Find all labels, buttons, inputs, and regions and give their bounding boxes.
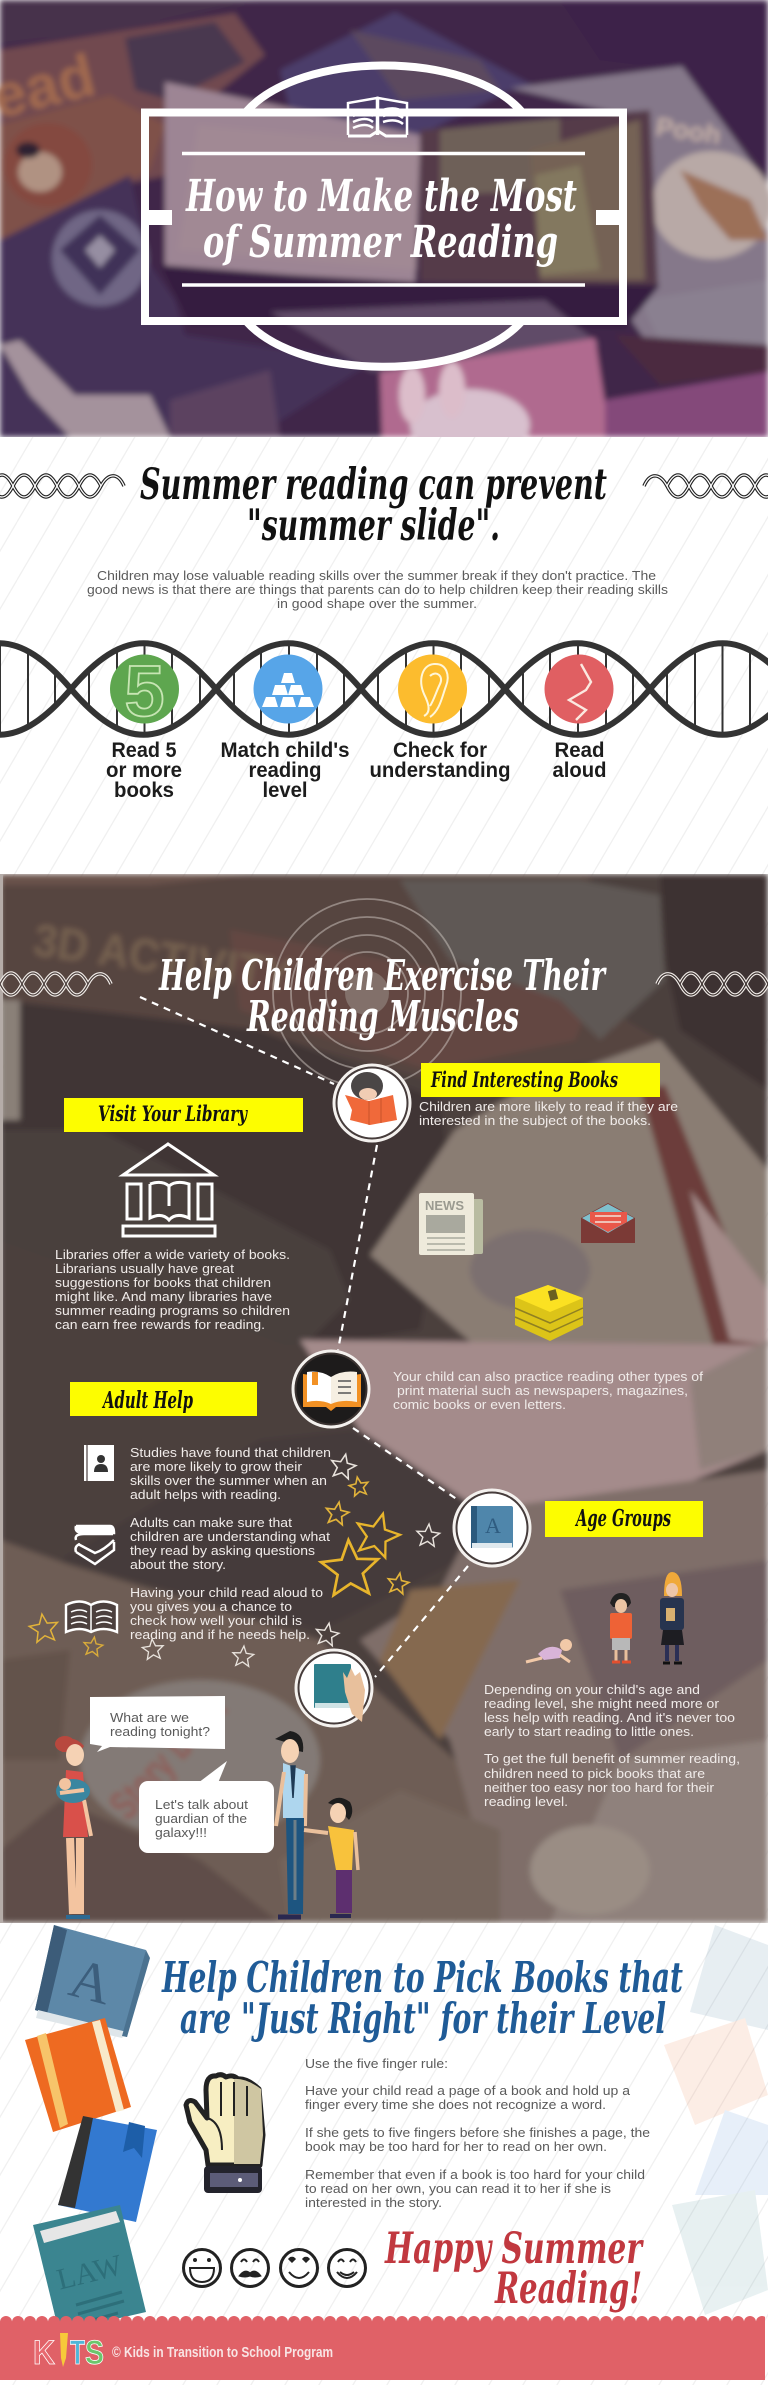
text: other print material [393, 1369, 703, 1412]
text: age groups: reading level, she might need more or [484, 1696, 720, 1711]
icon: ear [398, 654, 467, 724]
text: age groups: neither too easy nor too hard for their [484, 1780, 715, 1795]
panel: hero [0, 0, 768, 461]
text: find interesting books: interested in the subject of the books. [419, 1113, 651, 1128]
happy summer reading message: Reading! [494, 2264, 642, 2314]
icon: speaking profile [544, 654, 614, 724]
text: library [55, 1247, 290, 1332]
faded mirrored books [664, 1925, 768, 2315]
label: visit your library [64, 1098, 303, 1132]
ornament: right wave [644, 475, 768, 497]
text: library: can earn free rewards for reading. [55, 1317, 265, 1332]
label: adult help: Adult Help [102, 1387, 193, 1414]
text: adult help 3: you gives you a chance to [130, 1599, 292, 1614]
step labels: aloud [552, 759, 606, 782]
icons: smiley faces [184, 2250, 366, 2286]
icon: person card [84, 1445, 114, 1481]
heading: Help Children Exercise Their [158, 951, 607, 1000]
panel: reading muscles [0, 874, 768, 1923]
badge frame [141, 66, 627, 367]
text: five finger rule: to read on her own, you can read it to her if she is [305, 2181, 612, 2196]
icon: stack of books [76, 1526, 114, 1564]
intro paragraph: in good shape over the summer. [277, 596, 477, 611]
icon: newspaper: NEWS [425, 1198, 464, 1213]
ornament: right wave [657, 973, 768, 995]
logo: KITS: K [33, 2334, 55, 2372]
speech bubble: guardian of the galaxy [139, 1761, 274, 1853]
photo of book stacks [0, 874, 768, 1923]
icon: number five: 5 [124, 652, 165, 732]
speech bubble: guardian of the galaxy: galaxy!!! [155, 1825, 207, 1840]
text: adult help 2 [130, 1515, 330, 1572]
icon: newspaper [419, 1193, 483, 1255]
step labels [106, 739, 606, 802]
step labels: Check for [393, 739, 487, 762]
icon: teal law book: LAW [53, 2248, 126, 2297]
node: blue A book icon: A [485, 1513, 501, 1538]
figure: boy in yellow [304, 1798, 358, 1916]
text: adult help 1: skills over the summer when an [130, 1473, 327, 1488]
text: age groups: children need to pick books that are [484, 1766, 705, 1781]
text: age groups: To get the full benefit of summer reading, [484, 1751, 740, 1766]
title [185, 171, 577, 268]
step labels: Read 5 [112, 739, 177, 762]
text: find interesting books: Children are more likely to read if they are [419, 1099, 678, 1114]
node: blue A book icon [452, 1488, 532, 1568]
text: adult help 2: Adults can make sure that [130, 1515, 292, 1530]
speech bubble: guardian of the galaxy: guardian of the [155, 1811, 247, 1826]
heading: Summer reading can prevent [140, 460, 607, 510]
text: adult help 3 [130, 1585, 323, 1642]
step labels: level [262, 779, 308, 802]
icon: blue book [58, 2116, 157, 2222]
text: five finger rule: book may be too hard for her to read on her own. [305, 2139, 607, 2154]
text: five finger rule: interested in the story. [305, 2195, 442, 2210]
text: five finger rule: Remember that even if a book is too hard for your child [305, 2167, 645, 2182]
heading [161, 1953, 683, 2043]
text: five finger rule: If she gets to five fingers before she finishes a page, the [305, 2125, 650, 2140]
text: five finger rule: Use the five finger rule: [305, 2056, 448, 2071]
node: child reading icon [332, 1064, 412, 1142]
text: five finger rule [305, 2056, 650, 2210]
label: find interesting books [421, 1063, 660, 1097]
speech bubble: guardian of the galaxy: Let's talk about [155, 1797, 248, 1812]
speech bubble: what are we reading: reading tonight? [110, 1724, 210, 1739]
text: age groups [484, 1682, 740, 1809]
icon: number five [110, 652, 179, 732]
logo: KITS [33, 2333, 104, 2372]
hero photo of children's books [0, 0, 768, 461]
icon: stack of yellow books [515, 1285, 583, 1341]
heading [140, 460, 607, 551]
icon: open book [348, 98, 407, 136]
dotted connector path [140, 997, 468, 1677]
step labels: Read [554, 739, 604, 762]
text: other print material: Your child can also practice reading other types of [393, 1369, 703, 1384]
ornament: left wave [0, 973, 111, 995]
panel: footer [0, 2316, 765, 2380]
text: adult help 2: they read by asking questions [130, 1543, 316, 1558]
icon: envelope [581, 1203, 635, 1243]
stars decoration [28, 1452, 440, 1667]
text: age groups: less help with reading. And it's never too [484, 1710, 735, 1725]
figure: man with tie [275, 1731, 306, 1917]
text: adult help 2: children are understanding what [130, 1529, 330, 1544]
intro paragraph: good news is that there are things that parents can do to help children keep their reading skills [87, 582, 669, 597]
step labels: or more [106, 759, 182, 782]
text: other print material: comic books or even letters. [393, 1397, 566, 1412]
icon: open book outline [66, 1602, 117, 1632]
step labels: understanding [370, 759, 510, 782]
concentric sound rings [273, 899, 461, 1087]
photo of book stacks: 3D ACTIVITY [31, 913, 295, 1001]
text: age groups: early to start reading to little ones. [484, 1724, 694, 1739]
node: open book icon [292, 1350, 370, 1428]
icon: raised hand [186, 2075, 263, 2193]
icon: blue A book: A [63, 1947, 119, 2017]
icon: library building [123, 1144, 215, 1236]
title: of Summer Reading [203, 217, 558, 268]
heading: Reading Muscles [246, 992, 519, 1041]
heading: "summer slide". [247, 501, 500, 551]
text: adult help 3: Having your child read aloud to [130, 1585, 323, 1600]
text: library: summer reading programs so children [55, 1303, 290, 1318]
logo: KITS: S [85, 2334, 104, 2372]
label: adult help [70, 1382, 257, 1416]
figure: woman holding baby [55, 1736, 91, 1917]
text: library: might like. And many libraries have [55, 1289, 272, 1304]
hero photo of children's books: Pooh [654, 111, 723, 150]
icon: teal law book [33, 2205, 146, 2332]
photo of book stacks: Story book [100, 1685, 235, 1828]
text: age groups: Depending on your child's age and [484, 1682, 700, 1697]
node: hand on book icon [294, 1648, 374, 1728]
illustration: children of three ages [526, 1572, 684, 1663]
text: adult help 3: check how well your child is [130, 1613, 303, 1628]
text: library: Librarians usually have great [55, 1261, 234, 1276]
text: age groups: reading level. [484, 1794, 568, 1809]
text: adult help 1 [130, 1445, 331, 1502]
text: adult help 1: are more likely to grow their [130, 1459, 303, 1474]
icon: stacked gold bars [254, 654, 322, 724]
label: find interesting books: Find Interesting Books [430, 1067, 618, 1092]
left photo edge [0, 874, 3, 1923]
title: How to Make the Most [185, 171, 577, 222]
heading [158, 951, 607, 1041]
step labels: Match child's [220, 739, 350, 762]
text: adult help 3: reading and if he needs help. [130, 1627, 310, 1642]
text: adult help 2: about the story. [130, 1557, 226, 1572]
logo: KITS: T [70, 2334, 85, 2372]
panel: summer slide intro [0, 460, 768, 802]
intro paragraph [87, 568, 669, 611]
ornament: left wave [0, 475, 124, 497]
happy summer reading message: Happy Summer [384, 2224, 644, 2274]
icon: blue A book [35, 1925, 150, 2038]
icon: orange book [25, 2018, 131, 2132]
text: library: suggestions for books that children [55, 1275, 271, 1290]
intro paragraph: Children may lose valuable reading skills over the summer break if they don't practice. The [97, 568, 656, 583]
text: library: Libraries offer a wide variety of books. [55, 1247, 290, 1262]
step labels: books [114, 779, 174, 802]
girl [660, 1572, 684, 1663]
text: five finger rule: Have your child read a page of a book and hold up a [305, 2083, 631, 2098]
text: find interesting books [419, 1099, 678, 1128]
baby [526, 1639, 572, 1662]
copyright text: © Kids in Transition to School Program [112, 2344, 333, 2361]
label: age groups [545, 1501, 703, 1537]
panel: just right books [25, 1925, 768, 2332]
DNA helix [0, 643, 768, 735]
step labels: reading [248, 759, 322, 782]
text: adult help 1: adult helps with reading. [130, 1487, 281, 1502]
text: adult help 1: Studies have found that children [130, 1445, 331, 1460]
boy [610, 1593, 632, 1662]
happy summer reading message [384, 2224, 644, 2314]
label: visit your library: Visit Your Library [98, 1101, 249, 1126]
label: age groups: Age Groups [575, 1505, 671, 1532]
speech bubble: what are we reading [90, 1696, 225, 1752]
speech bubble: what are we reading: What are we [110, 1710, 189, 1725]
text: other print material: print material such as newspapers, magazines, [397, 1383, 688, 1398]
text: five finger rule: finger every time she does not recognize a word. [305, 2097, 606, 2112]
